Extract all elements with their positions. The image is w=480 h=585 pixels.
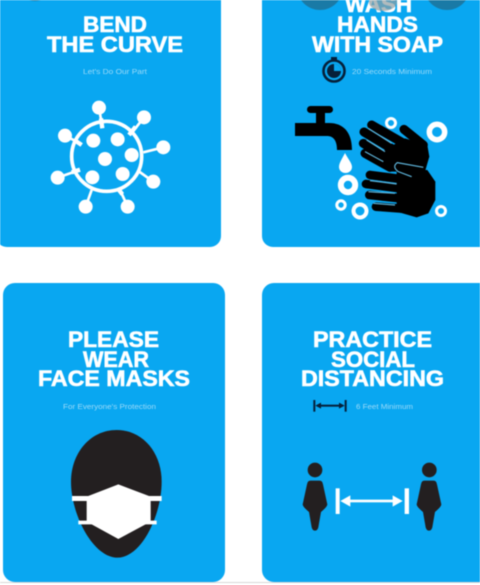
- panel: please wear face masks: [3, 283, 225, 582]
- panel: practice social distancing: [262, 283, 480, 582]
- icon: two people with arrow: [303, 463, 441, 531]
- icon: tap and water drop: [295, 106, 352, 173]
- subtitle: 20 seconds minimum: 20 Seconds Minimum: [352, 69, 432, 76]
- person left: [303, 463, 327, 531]
- subtitle: for everyone's protection: For Everyone's Protection: [63, 404, 156, 411]
- icon: stopwatch: [324, 57, 344, 82]
- lower palm: [397, 170, 435, 217]
- heading: practice social distancing: SOCIAL: [331, 347, 415, 372]
- heading: please wear face masks: PLEASE: [68, 327, 159, 352]
- panel: wash hands with soap: [262, 0, 480, 247]
- person right: [417, 463, 441, 531]
- heading: practice social distancing: PRACTICE: [313, 327, 432, 352]
- heading: bend the curve: BEND: [83, 12, 147, 37]
- head: [71, 430, 162, 558]
- finger separators: [365, 128, 423, 205]
- icon: soap bubbles: [337, 118, 446, 218]
- icon: washing hands: [363, 125, 435, 217]
- heading: practice social distancing: DISTANCING: [301, 366, 444, 391]
- heading: bend the curve: [47, 12, 183, 57]
- overlay button: top left: [17, 0, 53, 1]
- icon: virus: [51, 101, 170, 214]
- lower hand: [366, 175, 403, 209]
- heading: wash hands with soap: HANDS: [337, 12, 418, 37]
- upper hand: [363, 125, 423, 167]
- overlay button: top right: [424, 0, 470, 10]
- mask: [87, 484, 151, 539]
- icon: small distance measure: [313, 400, 347, 412]
- panel: bend the curve: [0, 0, 221, 247]
- distance arrow: [336, 488, 409, 514]
- heading: practice social distancing: [301, 327, 444, 391]
- heading: bend the curve: THE CURVE: [47, 32, 183, 57]
- heading: please wear face masks: FACE MASKS: [38, 366, 190, 391]
- heading: please wear face masks: [38, 327, 190, 391]
- subtitle: let's do our part: Let's Do Our Part: [83, 69, 147, 76]
- heading: please wear face masks: WEAR: [83, 347, 149, 372]
- overlay button: top centre: [297, 0, 343, 10]
- heading: wash hands with soap: WITH SOAP: [312, 32, 443, 57]
- subtitle: 6 feet minimum: 6 Feet Minimum: [356, 404, 413, 411]
- icon: face with mask: [71, 430, 162, 558]
- heading: wash hands with soap: [312, 0, 443, 57]
- upper palm: [382, 138, 429, 172]
- mask straps: [72, 496, 162, 524]
- overlay smudge on heading: [369, 0, 397, 11]
